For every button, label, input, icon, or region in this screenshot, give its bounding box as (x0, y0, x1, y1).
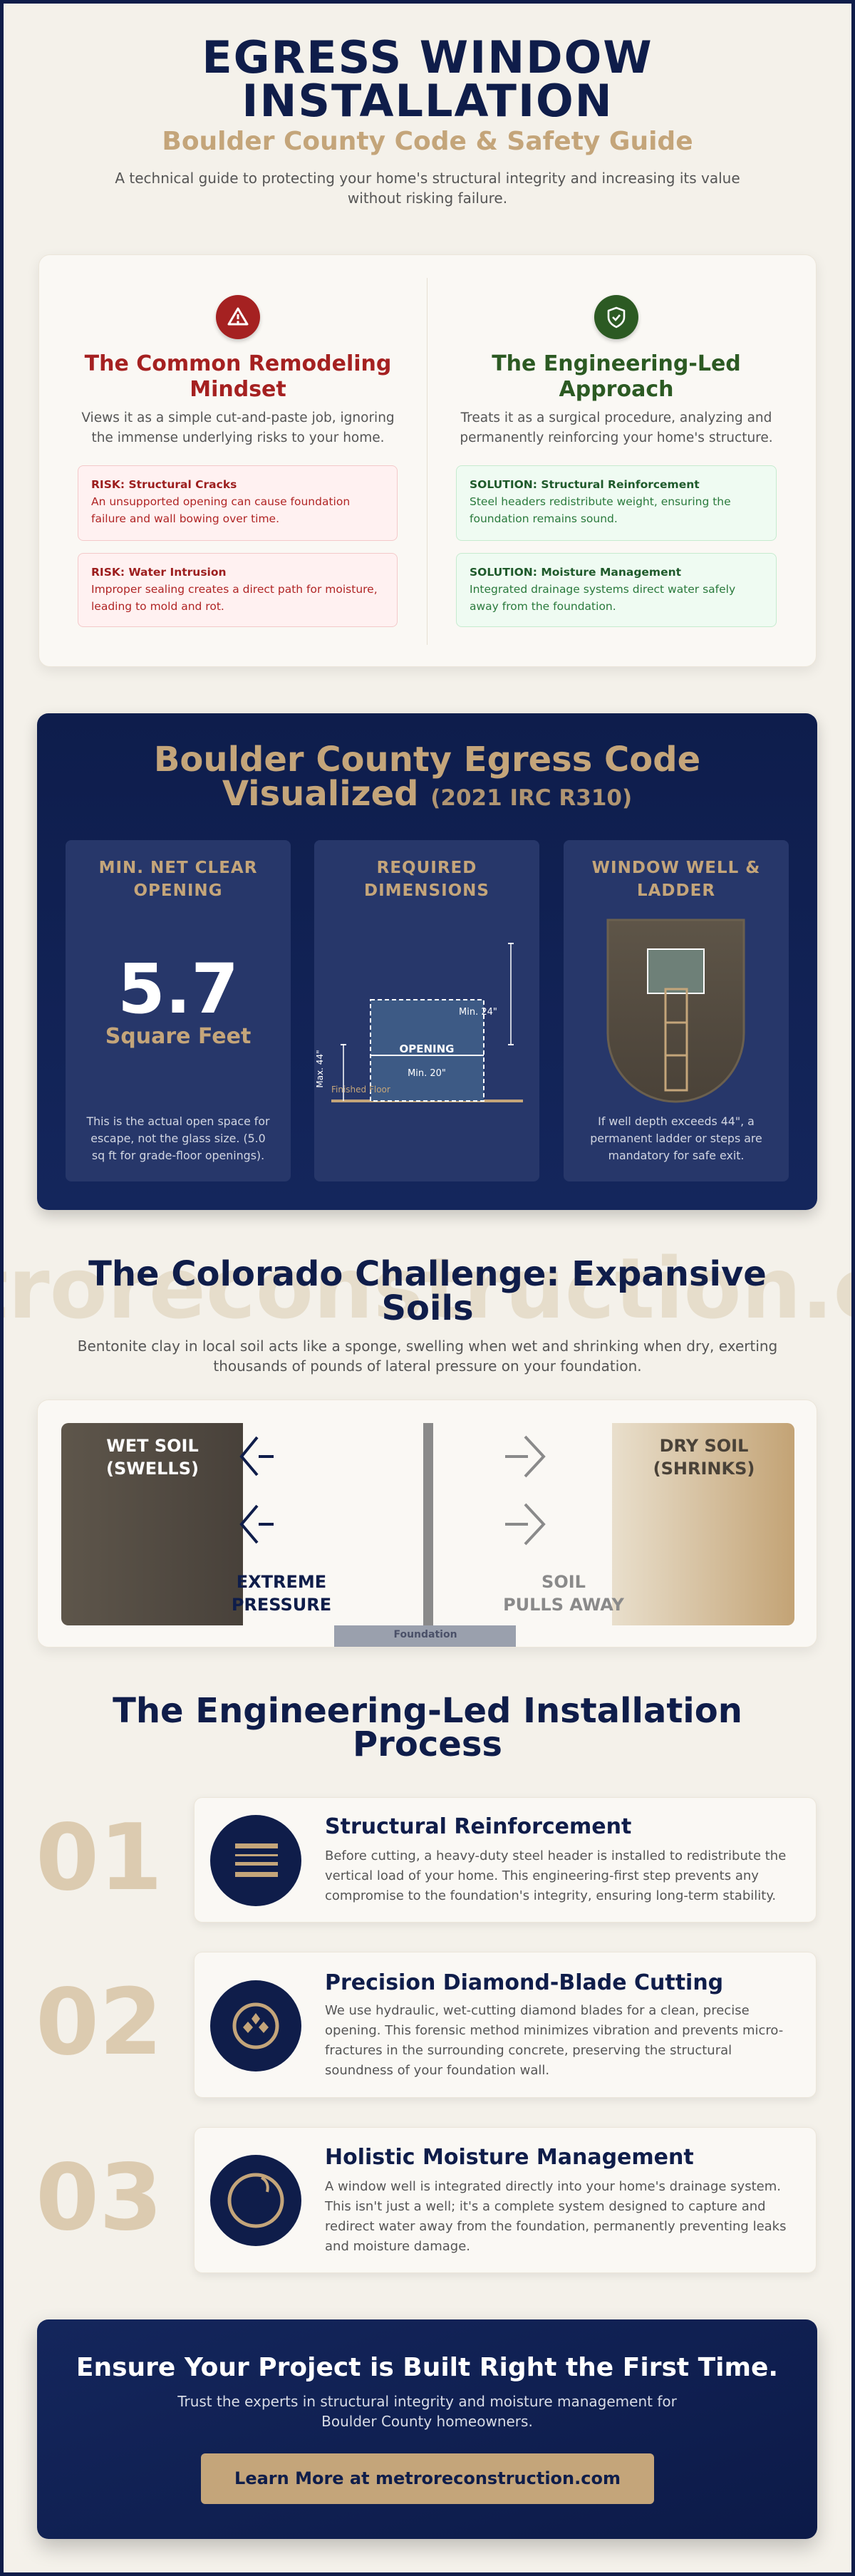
card text: If well depth exceeds 44", a (598, 1114, 755, 1128)
step text: vertical load of your home. This engineering-first step prevents any (325, 1868, 759, 1883)
heading: expansive soils: Soils (381, 1288, 474, 1328)
text: common mindset: Views it as a simple cut-and-paste job, ignoring (81, 410, 395, 425)
solution: reinforcement: foundation remains sound. (470, 512, 618, 525)
step text: Before cutting, a heavy-duty steel header is installed to redistribute the (325, 1848, 786, 1863)
dimensions diagram: Min. 24" (459, 1007, 497, 1018)
step text: A window well is integrated directly into your home's drainage system. (325, 2179, 781, 2194)
cta button (201, 2453, 654, 2504)
heading: expansive soils (88, 1254, 767, 1328)
step text (325, 2179, 786, 2254)
wet soil block (61, 1423, 243, 1625)
cta text (177, 2393, 677, 2430)
panel: soil diagram: PULLS AWAY (503, 1595, 625, 1615)
risk: water (78, 553, 398, 627)
risk: water: RISK: Water Intrusion (91, 566, 227, 579)
panel: soil diagram: Foundation (393, 1629, 457, 1640)
step 2 card (194, 1952, 817, 2098)
foundation wall (423, 1423, 433, 1625)
step 3 card (194, 2127, 817, 2273)
risk: cracks (78, 465, 398, 541)
dimensions diagram: Max. 44" (315, 1050, 325, 1088)
title: EGRESS WINDOW (202, 31, 653, 83)
text: engineering approach (460, 410, 773, 445)
heading: common mindset (84, 351, 391, 402)
dry soil block: (SHRINKS) (653, 1459, 755, 1479)
step text: and moisture damage. (325, 2239, 470, 2254)
text: engineering approach: permanently reinforcing your home's structure. (460, 430, 773, 445)
card: window well (564, 840, 789, 1181)
step text: This isn't just a well; it's a complete system designed to capture and (325, 2199, 766, 2214)
panel: soil diagram: PRESSURE (232, 1595, 331, 1615)
card text: escape, not the glass size. (5.0 (90, 1132, 266, 1145)
step text: We use hydraulic, wet-cutting diamond blades for a clean, precise (325, 2003, 750, 2018)
step title: Holistic Moisture Management (325, 2145, 694, 2170)
card title: DIMENSIONS (364, 881, 489, 900)
window well illustration (607, 919, 745, 1103)
card text: This is the actual open space for (86, 1114, 270, 1128)
subtitle: Boulder County Code & Safety Guide (162, 127, 693, 156)
card title: LADDER (637, 881, 715, 900)
step 1 card (194, 1797, 817, 1923)
icon: header bars (210, 1815, 301, 1906)
card text (86, 1114, 270, 1162)
panel: comparison (38, 254, 817, 667)
cta text: Trust the experts in structural integrity and moisture management for (177, 2393, 677, 2410)
step text: redirect water away from the foundation, permanently preventing leaks (325, 2219, 786, 2234)
risk: cracks: failure and wall bowing over time. (91, 512, 279, 525)
heading: common mindset: The Common Remodeling (85, 351, 391, 376)
panel: soil diagram: SOIL (542, 1572, 586, 1592)
solution: reinforcement (456, 465, 777, 541)
card: net clear opening (66, 840, 291, 1181)
text: soils intro (78, 1338, 777, 1375)
heading: engineering approach: Approach (559, 377, 673, 402)
heading: process: Process (353, 1724, 502, 1764)
card: required dimensions (314, 840, 539, 1181)
card title: WINDOW WELL & (592, 859, 760, 877)
stat label: Square Feet (105, 1024, 251, 1049)
heading: engineering approach: The Engineering-Led (492, 351, 741, 376)
stat: 5.7: 5.7 (118, 949, 239, 1029)
step number 02: 02 (36, 1970, 162, 2076)
icon: warning (216, 295, 260, 339)
card title (364, 859, 489, 900)
step text (325, 1848, 786, 1903)
step text: compromise to the foundation's integrity, ensuring long-term stability. (325, 1888, 776, 1903)
step title: Precision Diamond-Blade Cutting (325, 1970, 723, 1995)
heading: egress code: Boulder County Egress Code (154, 740, 700, 780)
heading: egress code: Visualized (2021 IRC R310) (222, 774, 632, 814)
heading: process (113, 1691, 742, 1764)
card text (590, 1114, 762, 1162)
panel: call to action (37, 2319, 817, 2539)
card title: OPENING (133, 881, 223, 900)
arrows: pressure (242, 1437, 274, 1543)
text: soils intro: Bentonite clay in local soil acts like a sponge, swelling when wet and shrinking when dry, exerting (78, 1338, 777, 1355)
step title: Structural Reinforcement (325, 1814, 631, 1839)
heading: egress code (154, 740, 700, 814)
step text: soundness of your foundation wall. (325, 2063, 549, 2078)
step number 01: 01 (36, 1805, 162, 1911)
wet soil block: WET SOIL (106, 1436, 199, 1456)
heading: common mindset: Mindset (190, 377, 286, 402)
intro text: without risking failure. (348, 190, 507, 207)
intro text (115, 170, 740, 207)
heading: process: The Engineering-Led Installation (113, 1691, 742, 1731)
title (202, 31, 653, 127)
card text: permanent ladder or steps are (590, 1132, 762, 1145)
solution: reinforcement: SOLUTION: Structural Reinforcement (470, 478, 700, 491)
dry soil block: DRY SOIL (660, 1436, 748, 1456)
step number 03: 03 (36, 2145, 162, 2251)
dimensions diagram: OPENING (399, 1043, 455, 1055)
cta text: Boulder County homeowners. (321, 2413, 533, 2430)
icon: moisture ring (210, 2155, 301, 2246)
card title (99, 859, 257, 900)
solution: moisture: away from the foundation. (470, 600, 616, 613)
step text: opening. This forensic method minimizes vibration and prevents micro- (325, 2023, 783, 2038)
panel: soil diagram (37, 1400, 817, 1647)
title: INSTALLATION (242, 75, 613, 127)
heading: engineering approach (492, 351, 741, 402)
solution: moisture: SOLUTION: Moisture Management (470, 566, 681, 579)
icon: diamond blade (210, 1980, 301, 2071)
card title: REQUIRED (377, 859, 477, 877)
cta heading: Ensure Your Project is Built Right the First Time. (76, 2353, 778, 2382)
step text (325, 2003, 783, 2078)
text: common mindset (81, 410, 395, 445)
dimensions diagram (315, 943, 523, 1102)
risk: water: leading to mold and rot. (91, 600, 224, 613)
risk: cracks: An unsupported opening can cause foundation (91, 495, 350, 508)
risk: cracks: RISK: Structural Cracks (91, 478, 237, 491)
panel: egress code (37, 713, 817, 1210)
risk: water: Improper sealing creates a direct path for moisture, (91, 583, 378, 596)
heading: expansive soils: The Colorado Challenge: Expansive (88, 1254, 767, 1294)
dry soil block (612, 1423, 794, 1625)
intro text: A technical guide to protecting your home's structural integrity and increasing its value (115, 170, 740, 187)
card title (592, 859, 760, 900)
card title: MIN. NET CLEAR (99, 859, 257, 877)
solution: reinforcement: Steel headers redistribute weight, ensuring the (470, 495, 731, 508)
text: common mindset: the immense underlying risks to your home. (91, 430, 385, 445)
text: engineering approach: Treats it as a surgical procedure, analyzing and (461, 410, 772, 425)
card text: mandatory for safe exit. (608, 1149, 744, 1162)
card text: sq ft for grade-floor openings). (92, 1149, 264, 1162)
panel: soil diagram: EXTREME (237, 1572, 326, 1592)
wet soil block: (SWELLS) (106, 1459, 199, 1479)
arrows: pulls away (505, 1437, 544, 1544)
dimensions diagram: Finished Floor (331, 1085, 390, 1095)
text: soils intro: thousands of pounds of lateral pressure on your foundation. (213, 1357, 642, 1375)
solution: moisture (456, 553, 777, 627)
cta button: Learn More at metroreconstruction.com (234, 2468, 621, 2488)
solution: moisture: Integrated drainage systems direct water safely (470, 583, 735, 596)
step text: fractures in the surrounding concrete, preserving the structural (325, 2043, 732, 2058)
dimensions diagram: Min. 20" (408, 1068, 446, 1079)
icon: shield (594, 295, 638, 339)
